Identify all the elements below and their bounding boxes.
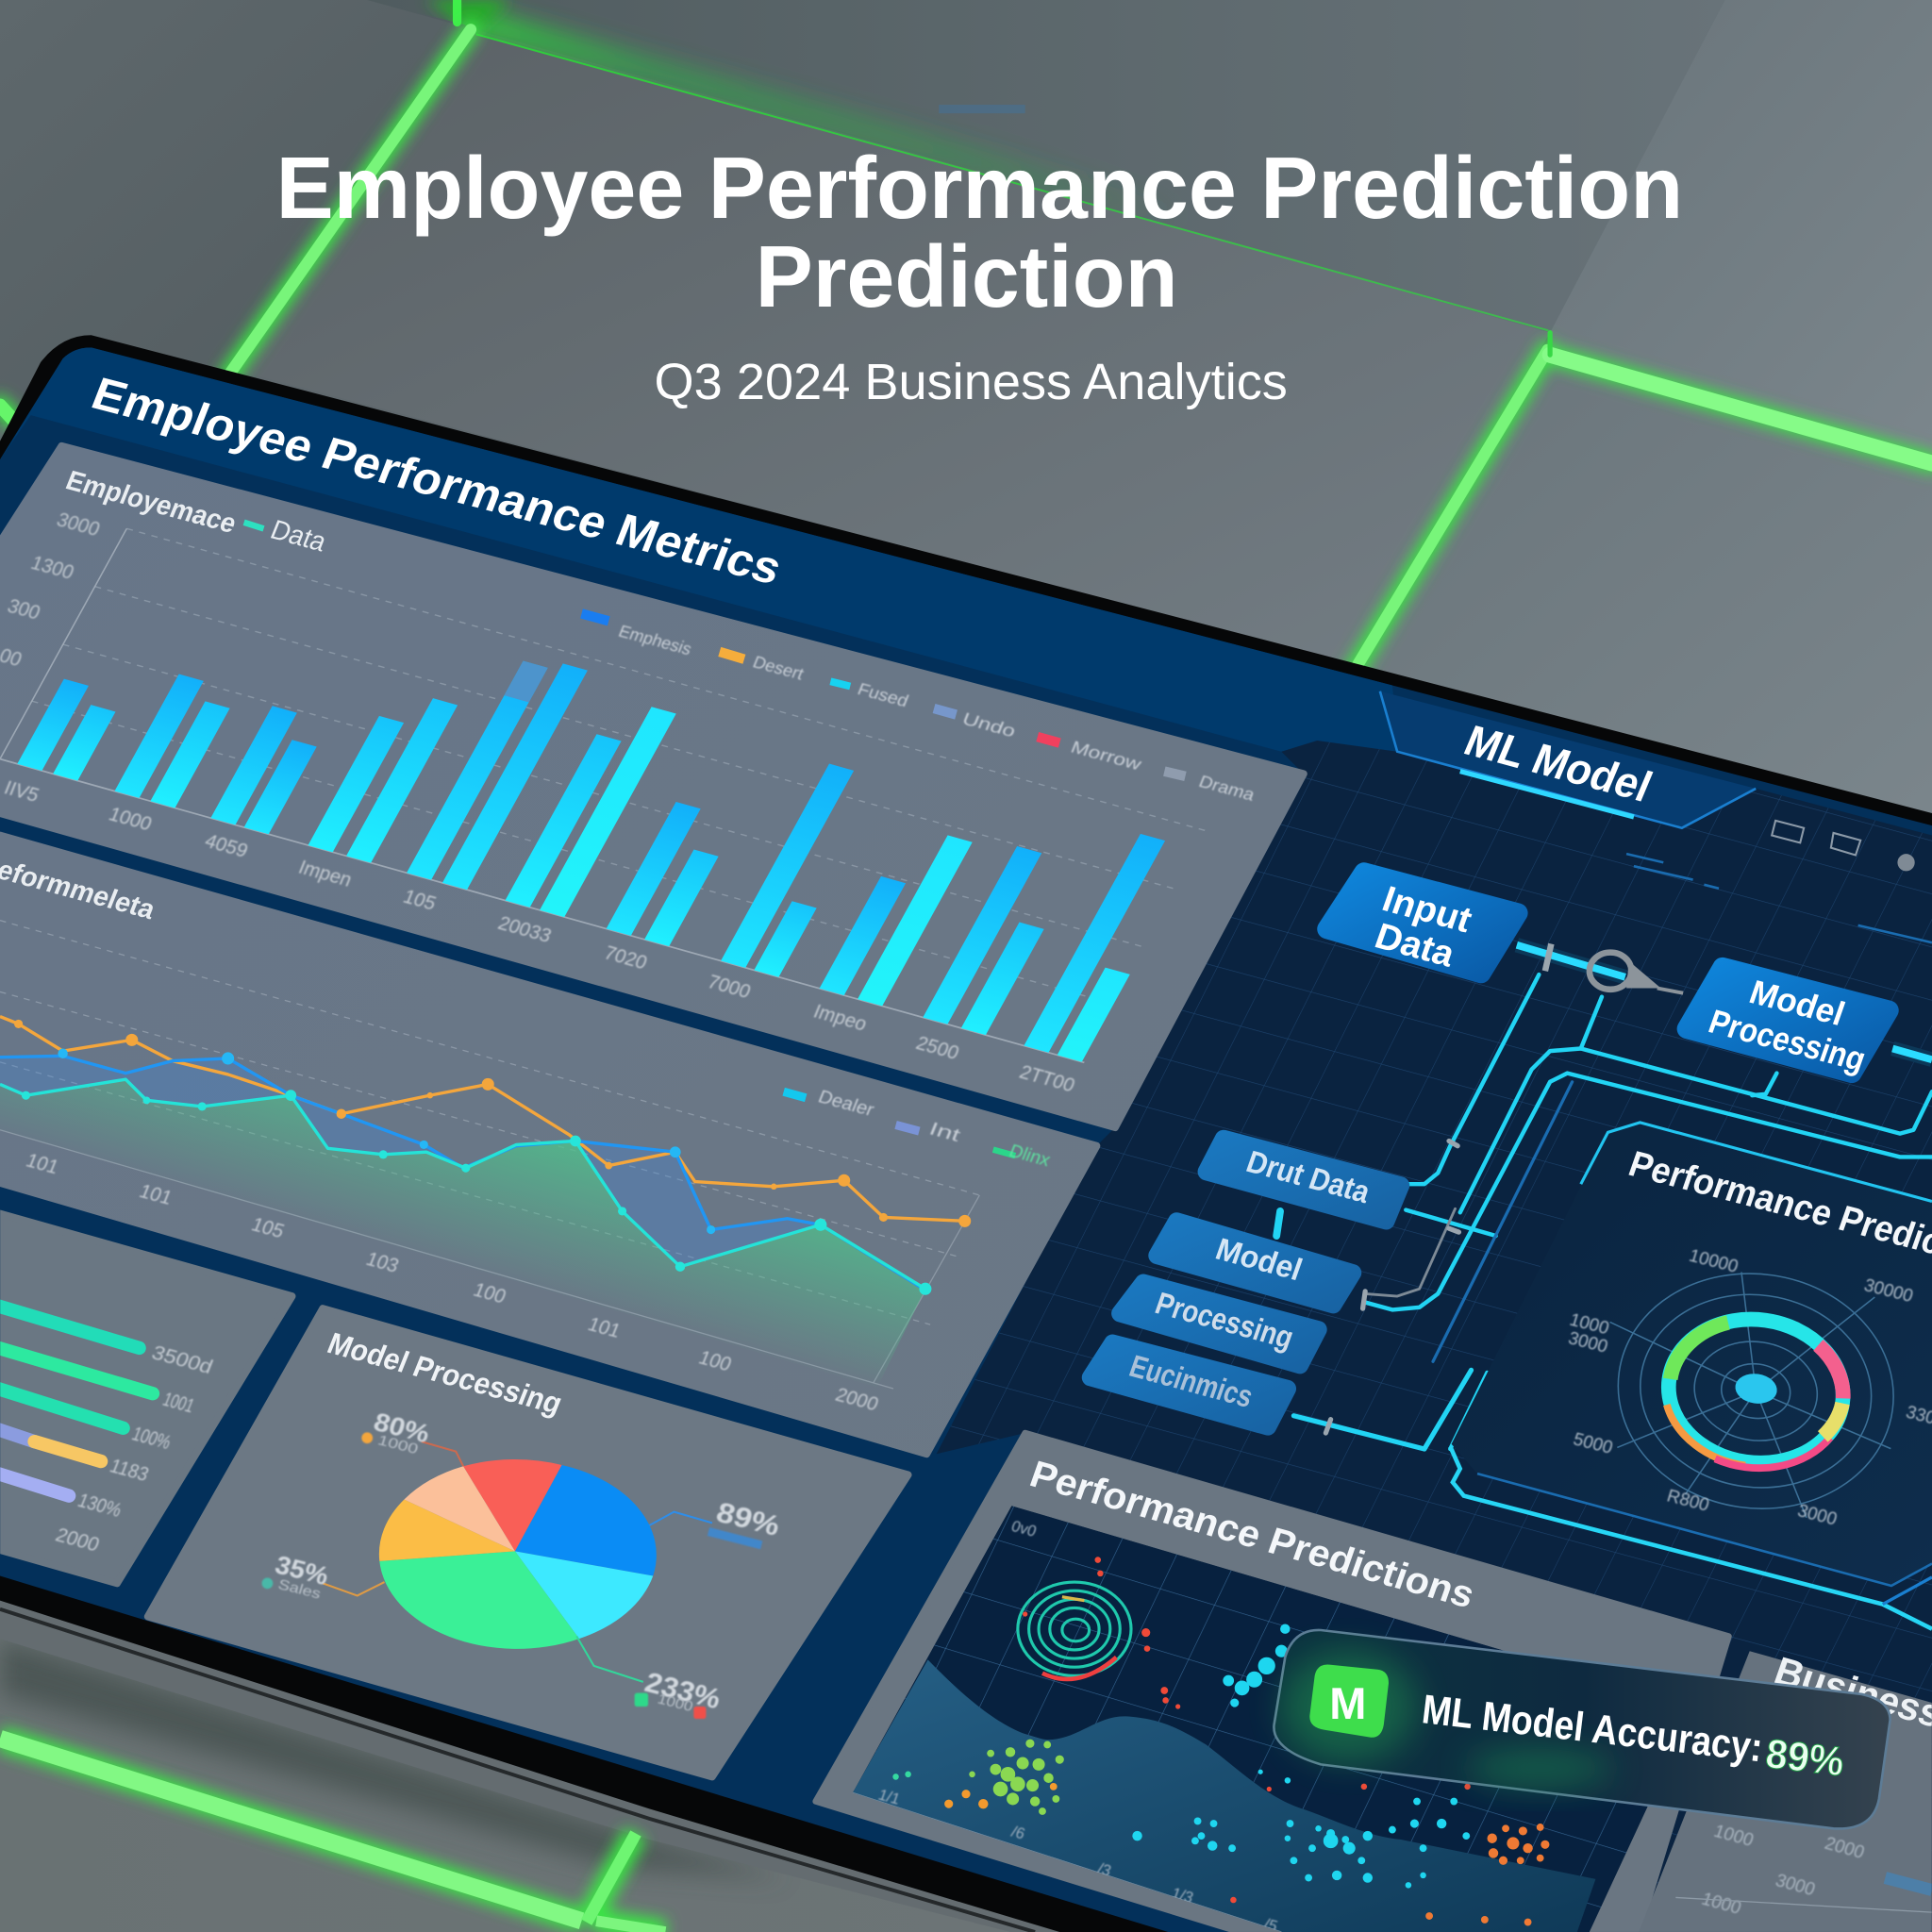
decorative blue dash above title	[939, 105, 1025, 113]
predictions chart ticks: /6	[1009, 1824, 1027, 1842]
ML Model tab: ML Model	[1457, 716, 1659, 811]
node: Drut Data: Drut Data	[1242, 1143, 1375, 1209]
panel: performance predictions	[816, 1433, 1728, 1932]
predictions chart ticks: /3	[1095, 1860, 1113, 1880]
bar chart x axis labels: 1000	[106, 803, 155, 835]
node: Model: Model	[1211, 1231, 1307, 1287]
bar chart legend: Undo	[959, 709, 1019, 741]
bar chart x axis labels: 7000	[705, 971, 754, 1003]
radial labels: R800	[1664, 1486, 1711, 1516]
spiral rings	[1018, 1582, 1131, 1679]
predictions chart ticks: 1/1	[876, 1787, 902, 1808]
node: Model Processing	[1687, 967, 1889, 1078]
progress bar labels: 1001	[159, 1389, 197, 1417]
pie chart heading: Model Processing	[323, 1325, 567, 1421]
input connector with valve	[1517, 943, 1932, 1059]
y axis labels: 1300	[27, 552, 77, 584]
bar chart x axis labels: Impen	[295, 857, 355, 891]
bar chart legend	[581, 613, 1257, 805]
mountain area	[853, 1659, 1595, 1932]
node: Input Data: Input	[1377, 878, 1477, 941]
title	[276, 139, 1683, 325]
bar chart x axis labels: 20033	[495, 912, 555, 947]
progress bar labels: 100%	[129, 1424, 174, 1454]
node: Model	[1157, 1221, 1353, 1305]
pie percentages: 80%	[371, 1407, 433, 1448]
progress bar labels	[53, 1341, 216, 1556]
pie sub-labels: 1000	[376, 1433, 420, 1457]
bar chart legend: Fused	[855, 679, 911, 710]
subtitle: Q3 2024 Business Analytics	[655, 355, 1288, 410]
title: Prediction	[756, 227, 1178, 325]
pie percentages: 35%	[272, 1550, 332, 1591]
panel: business stats partly hidden	[1639, 1649, 1932, 1932]
y axis labels: 3000	[54, 508, 103, 541]
panel: business stats partly hidden: 3000	[1773, 1871, 1818, 1900]
panel: horizontal bars	[0, 1214, 292, 1583]
line chart legend: Int	[926, 1119, 964, 1146]
node: Processing: Processing	[1151, 1285, 1298, 1355]
radial chart	[1587, 1254, 1912, 1528]
scatter dots: cyan	[1132, 1624, 1470, 1889]
blue and green area fills	[0, 1056, 925, 1388]
bar chart x axis labels: 7020	[601, 941, 650, 974]
node: Input Data	[1327, 873, 1518, 975]
line chart x axis labels: 103	[363, 1248, 402, 1277]
line chart legend: Dealer	[815, 1088, 877, 1121]
progress bar labels: 1183	[107, 1455, 152, 1486]
accuracy value: 89%	[1763, 1731, 1846, 1785]
line chart x axis labels: 101	[585, 1313, 624, 1342]
predictions dark chart	[853, 1506, 1694, 1932]
ML Model tab	[1380, 691, 1756, 828]
bar chart legend: Drama	[1196, 772, 1257, 805]
bar chart x axis labels: 2TT00	[1016, 1061, 1078, 1096]
line chart legend	[784, 1088, 1054, 1171]
chart points	[14, 1020, 971, 1295]
panel: bar chart	[0, 446, 1304, 1127]
pie sub-labels: 1000	[656, 1691, 694, 1715]
bar chart legend: Emphesis	[616, 622, 694, 658]
panel: business stats partly hidden: 1000	[1711, 1822, 1757, 1851]
radial labels	[1566, 1246, 1932, 1530]
top right toolbar icons	[1626, 821, 1932, 942]
radial labels: 3000	[1566, 1328, 1610, 1357]
pie sub-labels: Sales	[276, 1577, 323, 1603]
icon: M badge	[1309, 1664, 1389, 1738]
progress bar labels: 2000	[53, 1524, 103, 1556]
node: Model Processing: Processing	[1704, 1003, 1871, 1078]
bar chart x axis labels: Impeo	[810, 1001, 870, 1036]
predictions heading: Performance Predictions	[1024, 1454, 1480, 1616]
header band	[0, 345, 1397, 752]
bar chart legend: Morrow	[1068, 738, 1144, 774]
line chart x axis labels: 2000	[832, 1384, 882, 1415]
scatter dots: orange cluster	[1425, 1824, 1549, 1925]
line chart grid and axes	[0, 921, 979, 1389]
predictions chart ticks: 0v0	[1009, 1518, 1039, 1541]
bar chart heading: Data	[266, 515, 331, 558]
bar chart x axis labels: 4059	[202, 830, 251, 862]
node: Eucinmics: Eucinmics	[1125, 1348, 1257, 1414]
chart lines	[0, 1017, 965, 1291]
bar chart x axis labels: 2500	[913, 1032, 962, 1064]
bar chart heading: Employemace	[61, 466, 241, 540]
pie chart	[379, 1459, 657, 1649]
panel: business stats partly hidden: 1000	[1699, 1890, 1743, 1919]
radial labels: 10000	[1687, 1246, 1740, 1277]
bar chart legend: Desert	[750, 652, 807, 684]
line chart x axis labels	[23, 1150, 882, 1415]
node: Model Processing: Model	[1744, 973, 1850, 1033]
line chart x axis labels: 101	[23, 1150, 62, 1178]
node: Input Data: Data	[1370, 916, 1460, 975]
radial labels: 30000	[1861, 1275, 1915, 1307]
progress bar labels: 130%	[75, 1490, 125, 1522]
node: Drut Data	[1207, 1139, 1401, 1221]
bar chart heading	[66, 470, 325, 551]
pie percentages	[272, 1407, 783, 1715]
radial labels: 3000	[1795, 1501, 1840, 1530]
bar chart x axis labels	[1, 774, 1079, 1096]
line chart x axis labels: 101	[136, 1180, 175, 1209]
radial labels: 5000	[1571, 1429, 1615, 1458]
dark ML section background with grid	[937, 741, 1932, 1932]
panel: business stats partly hidden: 2000	[1822, 1834, 1867, 1863]
panel: performance radial	[1450, 1123, 1932, 1629]
predictions chart ticks	[876, 1518, 1280, 1932]
bar chart x axis labels: IIV5	[1, 776, 42, 807]
radial labels: 1000	[1567, 1310, 1611, 1339]
icon: M badge: M	[1329, 1678, 1366, 1728]
title: Employee Performance Prediction	[276, 139, 1683, 237]
scatter dots: red and orange	[1023, 1557, 1471, 1903]
predictions chart ticks: 1/3	[1169, 1885, 1195, 1907]
pie percentages: 89%	[713, 1497, 783, 1542]
progress bar labels: 3500d	[148, 1341, 216, 1378]
line chart x axis labels: 100	[695, 1347, 735, 1375]
header title: Employee Performance Metrics	[85, 368, 789, 594]
progress bars	[0, 1304, 153, 1496]
line chart legend: Dlinx	[1007, 1141, 1054, 1171]
callout: ML model accuracy badge	[1274, 1630, 1890, 1828]
pie percentages: 233%	[641, 1667, 724, 1715]
pie leader lines	[323, 1441, 712, 1682]
y axis labels: 300	[5, 595, 43, 624]
line chart x axis labels: 100	[470, 1279, 509, 1307]
connector lines	[1276, 974, 1932, 1449]
accuracy label: ML Model Accuracy:	[1420, 1687, 1765, 1771]
line chart x axis labels: 105	[248, 1213, 288, 1242]
bars and axis	[0, 528, 1211, 1062]
green neon seams on the wall	[0, 0, 1932, 673]
bar chart x axis labels: 105	[400, 886, 440, 915]
panel: line chart	[0, 836, 1096, 1454]
scatter dots: green cluster	[892, 1740, 1064, 1815]
panel: pie chart	[148, 1308, 908, 1776]
y axis labels	[0, 508, 103, 671]
pie sub-labels	[262, 1432, 761, 1719]
green neon seams below the device	[0, 1739, 665, 1932]
